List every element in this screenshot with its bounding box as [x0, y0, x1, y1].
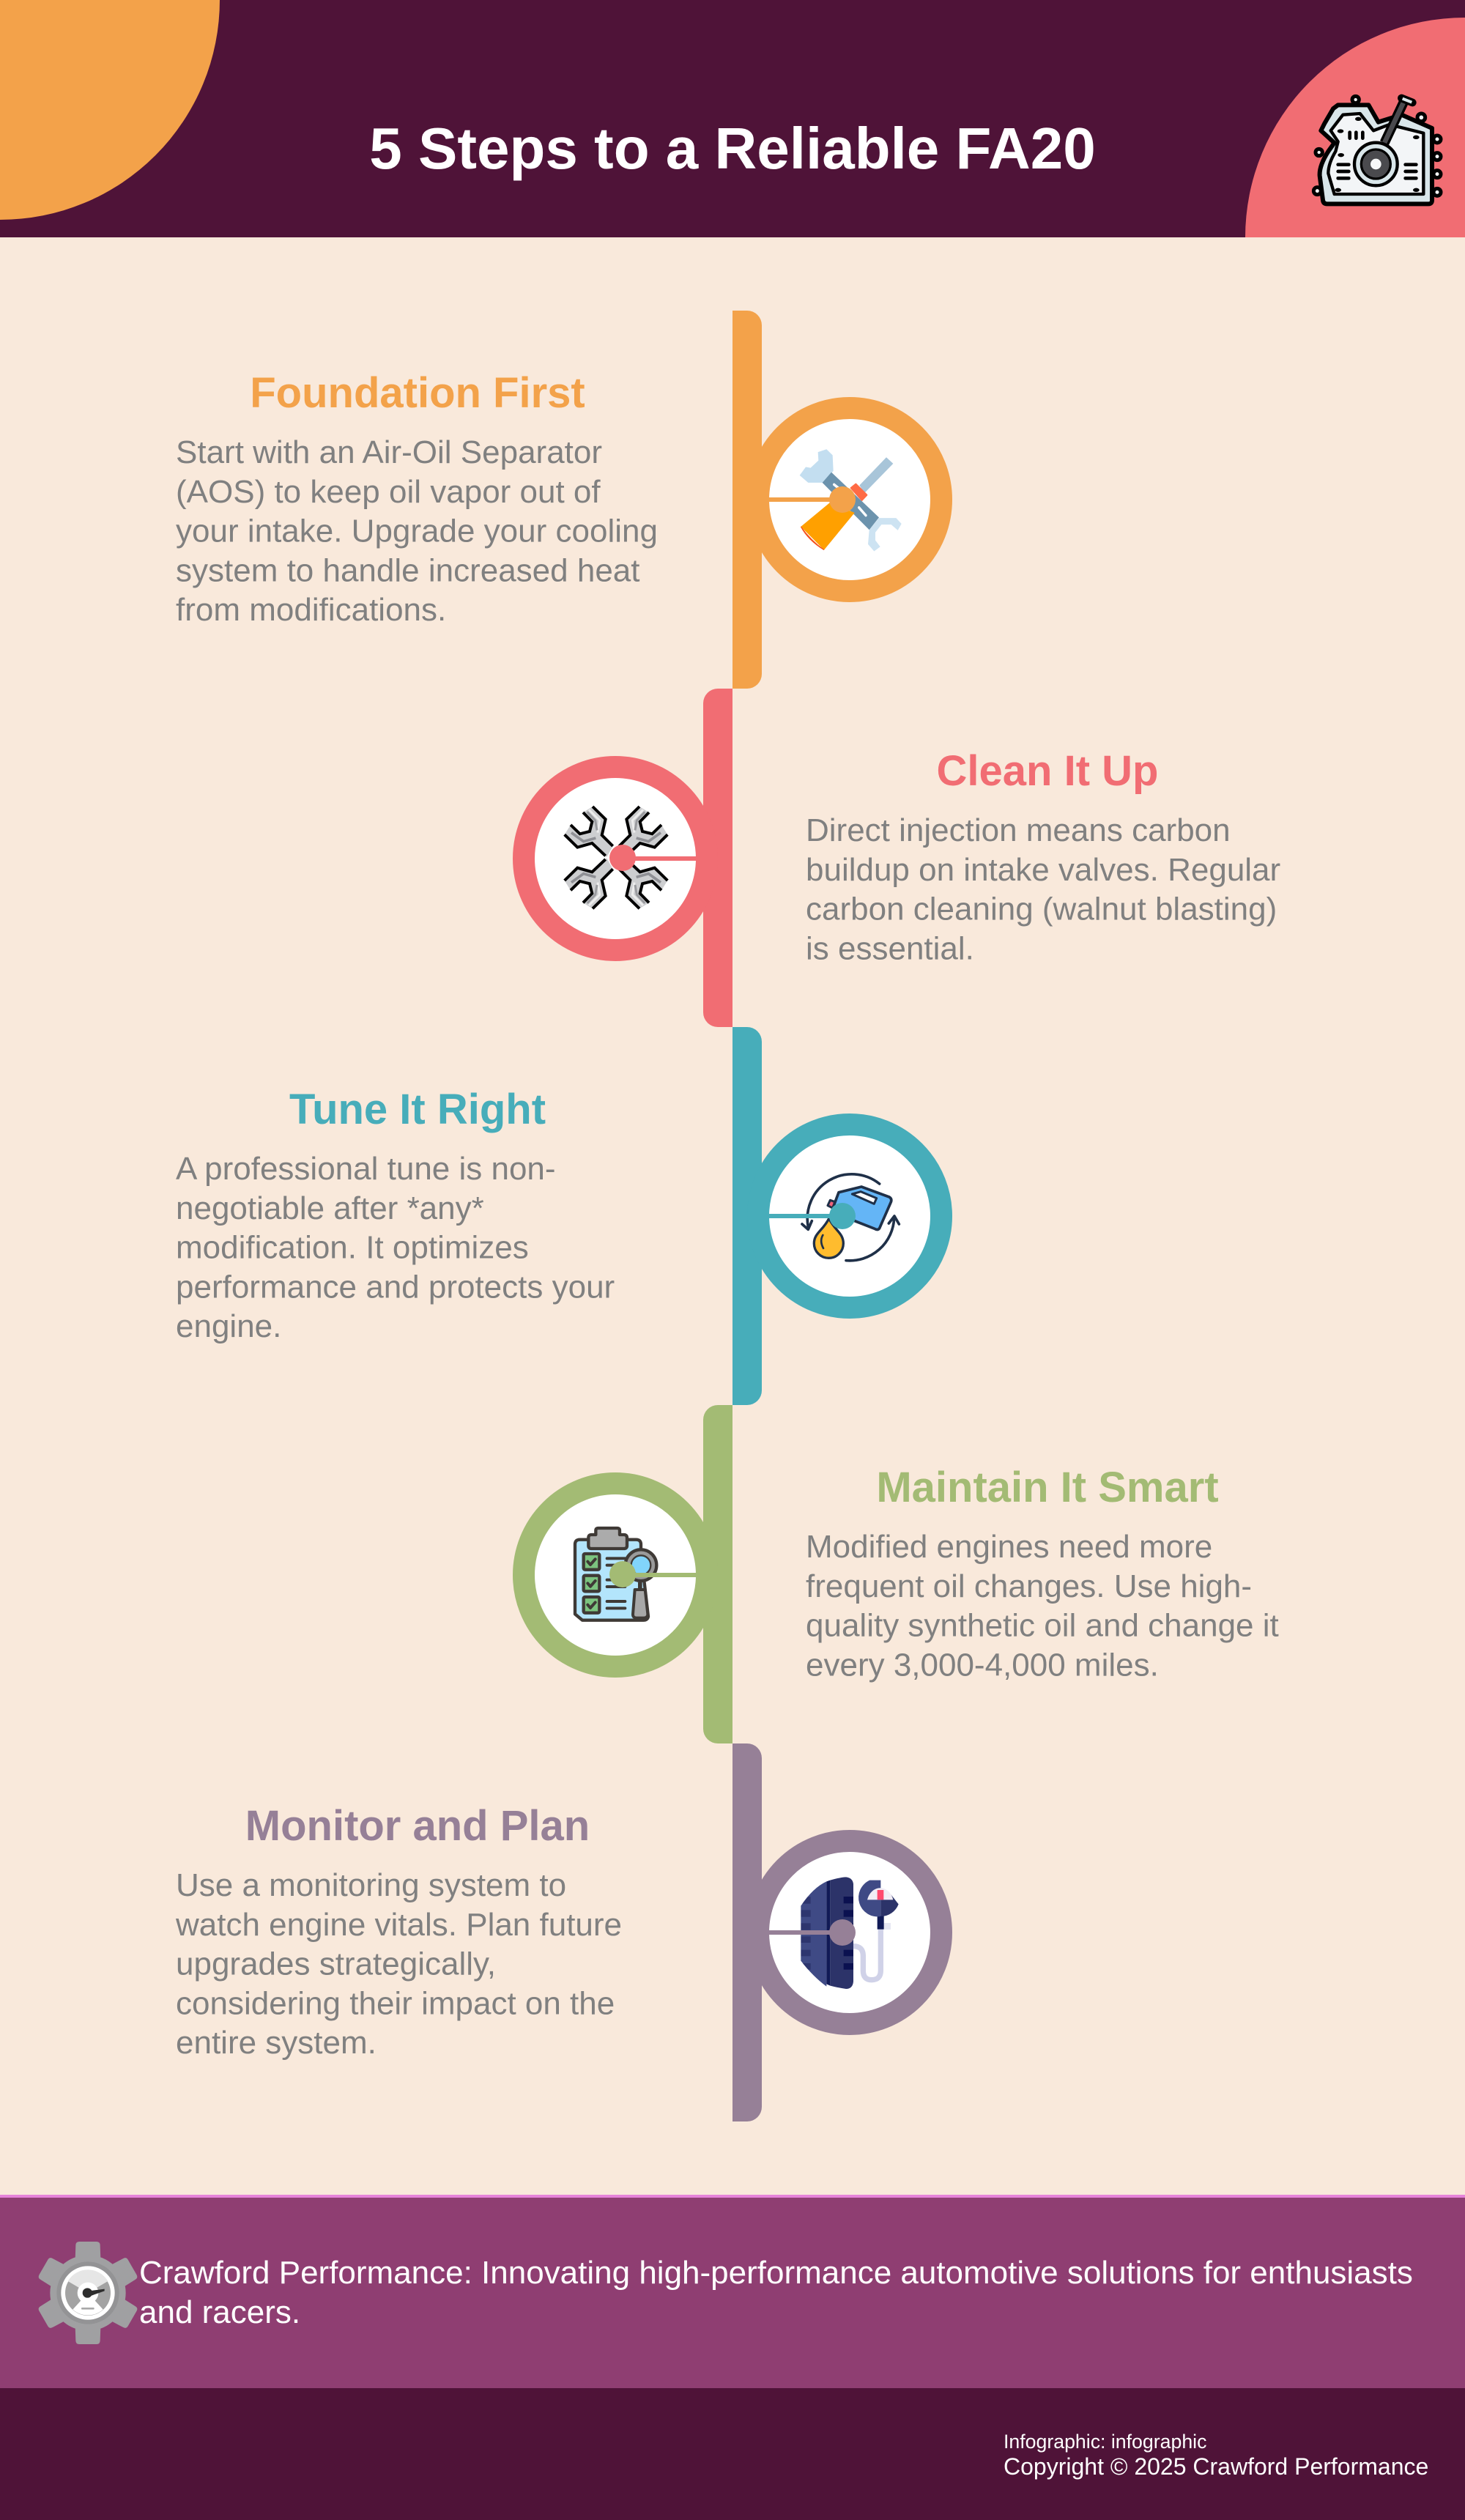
step 4: Maintain It Smart: [524, 1405, 1279, 1743]
text 5: Use a monitoring system to: [176, 1867, 566, 1903]
text 4: every 3,000-4,000 miles.: [806, 1647, 1159, 1683]
text 3: performance and protects your: [176, 1269, 615, 1305]
text 5: considering their impact on the: [176, 1985, 615, 2021]
text 2: carbon cleaning (walnut blasting): [806, 892, 1277, 927]
connector 4: [609, 1561, 703, 1587]
banner text: Crawford Performance: Innovating high-performance automotive solutions for enthusiasts: [139, 2255, 1413, 2291]
banner text: and racers.: [139, 2294, 300, 2330]
text 2: is essential.: [806, 930, 974, 966]
icon: crossed wrench and screwdriver: [800, 449, 902, 551]
text 4: Modified engines need more: [806, 1529, 1212, 1565]
text 3: modification. It optimizes: [176, 1230, 529, 1266]
ring 1: [758, 408, 941, 591]
icon: radiator and gauge: [801, 1877, 899, 1989]
text 5: watch engine vitals. Plan future: [175, 1907, 622, 1943]
icon: oil jug and drop: [802, 1174, 899, 1261]
text 1: system to handle increased heat: [176, 552, 640, 588]
text 1: from modifications.: [176, 592, 446, 628]
text 1: (AOS) to keep oil vapor out of: [176, 474, 601, 510]
ring 4: [524, 1483, 707, 1667]
text 4: quality synthetic oil and change it: [806, 1608, 1279, 1644]
footer: [0, 2388, 1465, 2520]
heading 3: Tune It Right: [289, 1086, 546, 1133]
text 1: Start with an Air-Oil Separator: [176, 434, 602, 470]
text 2: Direct injection means carbon: [806, 812, 1231, 848]
timeline bar 5: [732, 1743, 762, 2121]
step 5: Monitor and Plan: [175, 1743, 941, 2121]
ring 2: [524, 767, 707, 950]
timeline bar 4: [703, 1405, 732, 1743]
ring 5: [758, 1841, 941, 2024]
text 3: A professional tune is non-: [176, 1151, 556, 1187]
step 3: Tune It Right: [176, 1027, 941, 1405]
copyright line: Copyright © 2025 Crawford Performance: [1004, 2453, 1428, 2480]
timeline bar 1: [732, 311, 762, 689]
text 1: your intake. Upgrade your cooling: [176, 514, 658, 549]
connector 5: [762, 1919, 856, 1946]
orange corner circle: [0, 0, 220, 220]
icon: engine with dipstick: [1313, 96, 1441, 204]
source line: Infographic: infographic: [1004, 2431, 1206, 2453]
connector 1: [762, 486, 856, 513]
step 1: Foundation First: [176, 311, 941, 689]
connector 3: [762, 1203, 856, 1229]
text 4: frequent oil changes. Use high-: [806, 1568, 1252, 1604]
company banner: [0, 2195, 1465, 2388]
icon: crossed wrenches: [565, 807, 667, 908]
icon: clipboard checklist with magnifier: [575, 1528, 656, 1620]
title: 5 Steps to a Reliable FA20: [369, 116, 1096, 181]
header band: [0, 0, 1465, 237]
timeline bar 3: [732, 1027, 762, 1405]
text 5: upgrades strategically,: [176, 1946, 496, 1982]
heading 4: Maintain It Smart: [876, 1464, 1219, 1511]
icon: gear with gauge: [37, 2242, 138, 2344]
step 2: Clean It Up: [524, 689, 1280, 1027]
pink corner circle: [1245, 18, 1465, 237]
text 2: buildup on intake valves. Regular: [806, 852, 1280, 888]
text 3: negotiable after *any*: [176, 1190, 484, 1226]
timeline bar 2: [703, 689, 732, 1027]
text 3: engine.: [176, 1308, 281, 1344]
text 5: entire system.: [176, 2025, 377, 2061]
heading 2: Clean It Up: [937, 747, 1158, 795]
heading 1: Foundation First: [250, 369, 585, 417]
connector 2: [609, 845, 703, 871]
ring 3: [758, 1124, 941, 1308]
heading 5: Monitor and Plan: [245, 1802, 590, 1850]
